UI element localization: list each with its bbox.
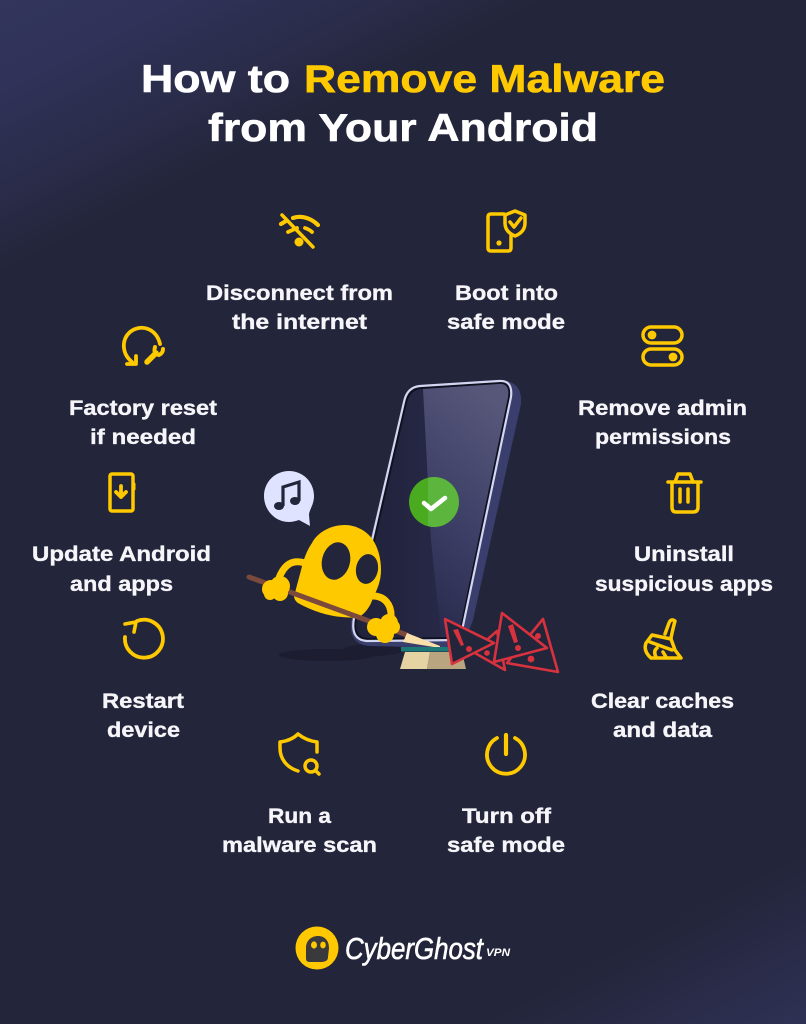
step: clear caches and data: Clear caches xyxy=(591,690,734,713)
step: remove admin permissions: Remove admin xyxy=(578,397,747,420)
step: disconnect from the internet: the internet xyxy=(232,311,367,334)
step: update android and apps xyxy=(32,474,211,596)
step: restart device xyxy=(102,620,184,742)
step: turn off safe mode: safe mode xyxy=(447,834,565,857)
logo mark xyxy=(296,926,338,970)
step: boot into safe mode: safe mode xyxy=(447,311,565,334)
step: run a malware scan: malware scan xyxy=(222,834,377,857)
step: restart device: device xyxy=(107,719,180,742)
icon: brush xyxy=(645,620,681,658)
step: run a malware scan xyxy=(222,734,377,857)
step: factory reset if needed xyxy=(69,328,217,449)
check badge xyxy=(409,477,459,527)
broom xyxy=(249,577,466,669)
icon: wifi off xyxy=(281,215,318,247)
speech bubble with music note xyxy=(264,471,314,526)
step: update android and apps: Update Android xyxy=(32,543,211,566)
step: disconnect from the internet: Disconnect from xyxy=(206,282,393,305)
logo: CyberGhost VPN: CyberGhost xyxy=(345,931,484,966)
title: How to xyxy=(141,58,290,101)
logo: CyberGhost VPN: VPN xyxy=(486,947,511,959)
step: uninstall suspicious apps xyxy=(595,474,773,596)
step: restart device: Restart xyxy=(102,690,184,713)
ground shadows xyxy=(279,644,403,661)
illustration: phone, ghost and broom xyxy=(249,380,558,970)
ghost character xyxy=(249,525,558,672)
step: clear caches and data xyxy=(591,620,734,742)
step: factory reset if needed: Factory reset xyxy=(69,397,217,420)
icon: power xyxy=(487,735,525,774)
icon: shield with magnifier xyxy=(280,734,319,774)
icon: toggles xyxy=(643,327,682,365)
step: update android and apps: and apps xyxy=(70,573,173,596)
step: disconnect from the internet xyxy=(206,215,393,334)
warning triangles xyxy=(445,613,558,672)
title xyxy=(141,58,665,150)
step: boot into safe mode xyxy=(447,211,565,334)
step: uninstall suspicious apps: suspicious apps xyxy=(595,573,773,596)
icon: phone with shield xyxy=(488,211,525,251)
step: boot into safe mode: Boot into xyxy=(455,282,558,305)
icon: trash can xyxy=(668,474,701,512)
icon: reset arrow with wrench xyxy=(124,328,163,364)
step: run a malware scan: Run a xyxy=(268,805,331,828)
icon: phone with download arrow xyxy=(110,474,134,511)
step: remove admin permissions: permissions xyxy=(595,426,731,449)
title: Remove Malware xyxy=(304,58,665,101)
title: from Your Android xyxy=(208,107,598,150)
step: turn off safe mode: Turn off xyxy=(462,805,552,828)
hand: right xyxy=(367,614,400,643)
logo: CyberGhost VPN xyxy=(296,926,511,970)
step: uninstall suspicious apps: Uninstall xyxy=(634,543,734,566)
phone xyxy=(351,380,521,648)
icon: restart arrow xyxy=(125,620,163,658)
step: clear caches and data: and data xyxy=(613,719,712,742)
step: turn off safe mode xyxy=(447,735,565,857)
step: remove admin permissions xyxy=(578,327,747,449)
step: factory reset if needed: if needed xyxy=(90,426,196,449)
hand: left xyxy=(262,576,290,601)
